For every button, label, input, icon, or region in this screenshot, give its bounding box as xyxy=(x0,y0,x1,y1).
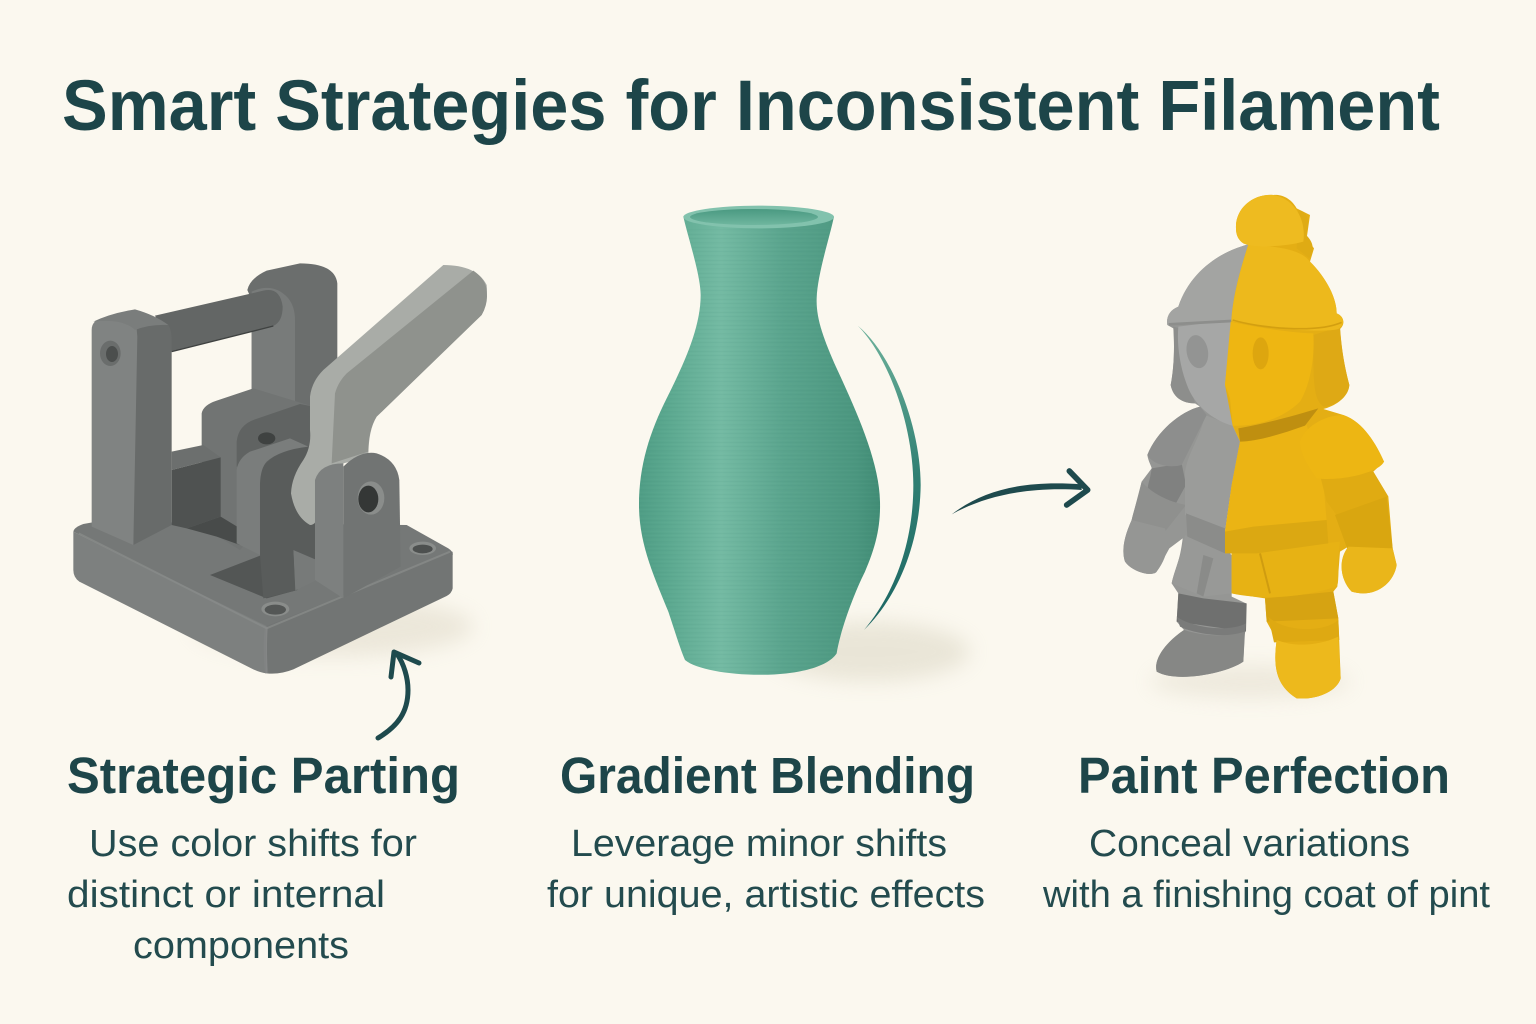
crossbar rod xyxy=(155,290,283,352)
heading: paint perfection: Paint Perfection xyxy=(1078,747,1450,804)
text block: paint perfection xyxy=(1042,823,1490,916)
title: Smart Strategies for Inconsistent Filament xyxy=(62,67,1440,146)
vase body xyxy=(639,217,880,675)
text block: strategic parting: distinct or internal xyxy=(67,874,385,916)
text block: gradient blending xyxy=(547,823,985,916)
back upright xyxy=(247,263,337,430)
pivot hole xyxy=(358,481,384,515)
icon: grey mechanical bracket with lever xyxy=(73,263,487,674)
text block: paint perfection: with a finishing coat of pint xyxy=(1042,874,1490,916)
floor recess xyxy=(210,550,317,598)
text block: paint perfection: Conceal variations xyxy=(1089,823,1410,865)
panel: gradient blending xyxy=(547,206,1088,916)
text block: gradient blending: Leverage minor shifts xyxy=(571,823,947,865)
panel: strategic parting xyxy=(67,263,487,967)
text block: strategic parting: components xyxy=(133,925,349,967)
lever arm xyxy=(291,265,487,525)
arrow: to figure xyxy=(952,471,1088,514)
text block: strategic parting xyxy=(67,823,417,967)
panel: paint perfection xyxy=(1042,195,1490,916)
text block: gradient blending: for unique, artistic effects xyxy=(547,874,985,916)
arrow: teal swoosh xyxy=(858,326,921,630)
yellow half xyxy=(1225,195,1397,699)
front left block xyxy=(237,438,317,598)
heading: gradient blending: Gradient Blending xyxy=(560,747,975,804)
vase rim xyxy=(683,206,834,228)
left upright hole xyxy=(100,341,121,366)
icon: teal vase xyxy=(630,206,970,682)
icon: half grey half yellow knight figure xyxy=(1123,195,1397,699)
text block: strategic parting: Use color shifts for xyxy=(89,823,417,865)
front pivot block xyxy=(315,453,401,598)
rear step block xyxy=(202,388,313,550)
grey half xyxy=(1123,244,1248,677)
left upright xyxy=(92,309,172,545)
bracket base plate xyxy=(73,522,453,674)
arrow: curved up to bracket xyxy=(378,652,419,738)
heading: strategic parting: Strategic Parting xyxy=(67,747,460,804)
dark rear block xyxy=(172,445,240,545)
